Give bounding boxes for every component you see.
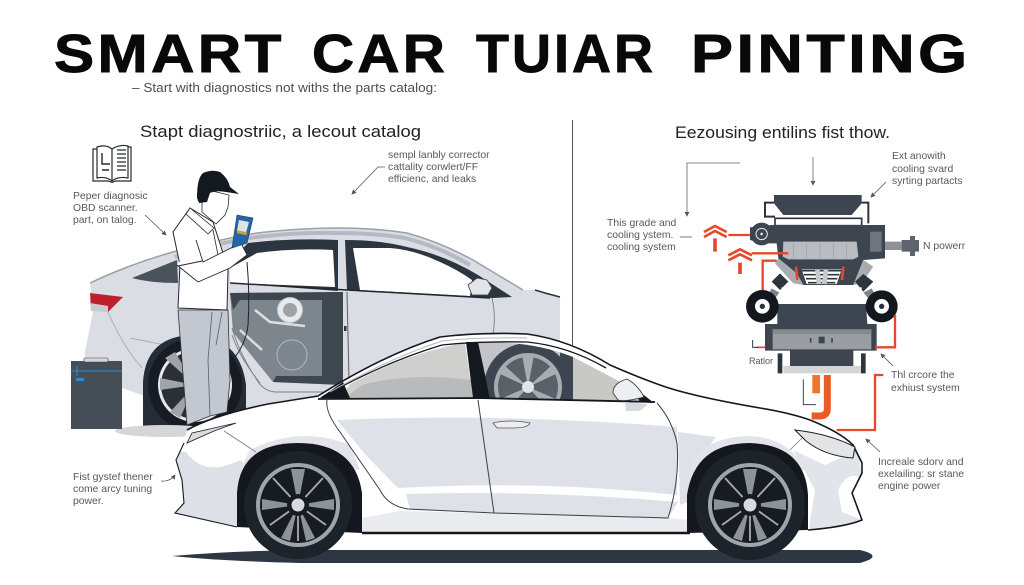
arrow: OBD note to scanner	[145, 215, 166, 235]
head	[202, 190, 229, 224]
arrow: catalytic note to car	[352, 167, 385, 194]
text: catalytic converter note: cattality corwlert/FF	[388, 162, 478, 173]
text: cooling parts note: Ext anowith	[892, 151, 946, 162]
title: PINTING	[691, 24, 971, 84]
trousers	[178, 310, 230, 425]
arrow: bracket down to cooling	[687, 163, 740, 216]
quarter window	[132, 260, 178, 283]
arm	[177, 240, 247, 282]
arrow: down to engine top	[812, 157, 814, 185]
text: engine power note: engine power	[878, 481, 941, 492]
text: engine power note: Increale sdorv and	[878, 457, 964, 468]
text: power label: N powerr	[923, 241, 966, 252]
rear wheel	[143, 335, 246, 432]
mirror	[468, 278, 492, 295]
headlights	[187, 423, 236, 443]
text: tuning power note: power.	[73, 496, 104, 507]
text: OBD scanner note: OBD scanner.	[73, 203, 138, 214]
scanner	[232, 215, 253, 248]
text: cooling system note: cooling system	[607, 242, 676, 253]
door lines	[327, 400, 678, 518]
pillar	[466, 342, 490, 398]
rear door window	[230, 239, 338, 291]
arrow: engine power to car	[866, 439, 880, 452]
door handle	[493, 421, 530, 428]
tail light	[90, 293, 123, 312]
ground shadow: rear car	[115, 425, 215, 437]
illustration: front car side view	[170, 333, 872, 563]
title: CAR	[312, 23, 448, 84]
text: OBD scanner note: part, on talog.	[73, 215, 137, 226]
text: ratio label: Ratlor	[749, 356, 773, 366]
text: catalytic converter note: sempl lanbly corrector	[388, 150, 490, 161]
front wheel right	[687, 443, 808, 560]
front wheel left	[237, 443, 362, 559]
heading: right panel: Eezousing entilins fist thow.	[675, 123, 890, 142]
text: catalytic converter note: efficienc, and leaks	[388, 174, 476, 185]
text: exhaust note: exhiust system	[891, 383, 960, 394]
heading: left panel: Stapt diagnostriic, a lecout catalog	[140, 122, 421, 141]
shirt	[173, 208, 228, 310]
tick: cooling note	[680, 236, 692, 238]
subtitle: – Start with diagnostics not withs the parts catalog:	[132, 80, 437, 95]
diagram: engine assembly	[704, 195, 919, 430]
text: exhaust note: Thl crcore the	[891, 370, 955, 381]
vertical divider	[572, 120, 574, 345]
ground shadow	[172, 550, 872, 563]
text: tuning power note: Fist gystef thener	[73, 472, 153, 483]
text: tuning power note: come arcy tuning	[73, 484, 152, 495]
arrow: exhaust note to engine	[881, 354, 893, 366]
side mirror	[613, 379, 644, 401]
side windows	[340, 343, 473, 398]
illustration: technician with scanner	[173, 171, 253, 425]
text: cooling system note: cooling ystem.	[607, 230, 673, 241]
text: engine power note: exelailing: sr stane	[878, 469, 964, 480]
illustration: rear car with open door panel	[85, 228, 560, 437]
front door window	[345, 240, 512, 298]
engine cutaway	[230, 292, 343, 385]
title: SMART	[54, 24, 285, 84]
scanner cable	[231, 262, 249, 362]
text: cooling parts note: cooling svard	[892, 164, 953, 175]
text: cooling parts note: syrting partacts	[892, 176, 962, 187]
icon: battery pack	[71, 358, 122, 429]
arrow: tuning note to car	[161, 475, 175, 481]
arrow: cooling parts to engine	[871, 182, 886, 197]
red coolant and exhaust lines	[704, 226, 895, 430]
text: OBD scanner note: Peper diagnosic	[73, 191, 148, 202]
icon: parts catalog book	[93, 145, 131, 183]
title	[54, 23, 971, 84]
text: cooling system note: This grade and	[607, 218, 677, 229]
title: TUIAR	[476, 24, 656, 84]
